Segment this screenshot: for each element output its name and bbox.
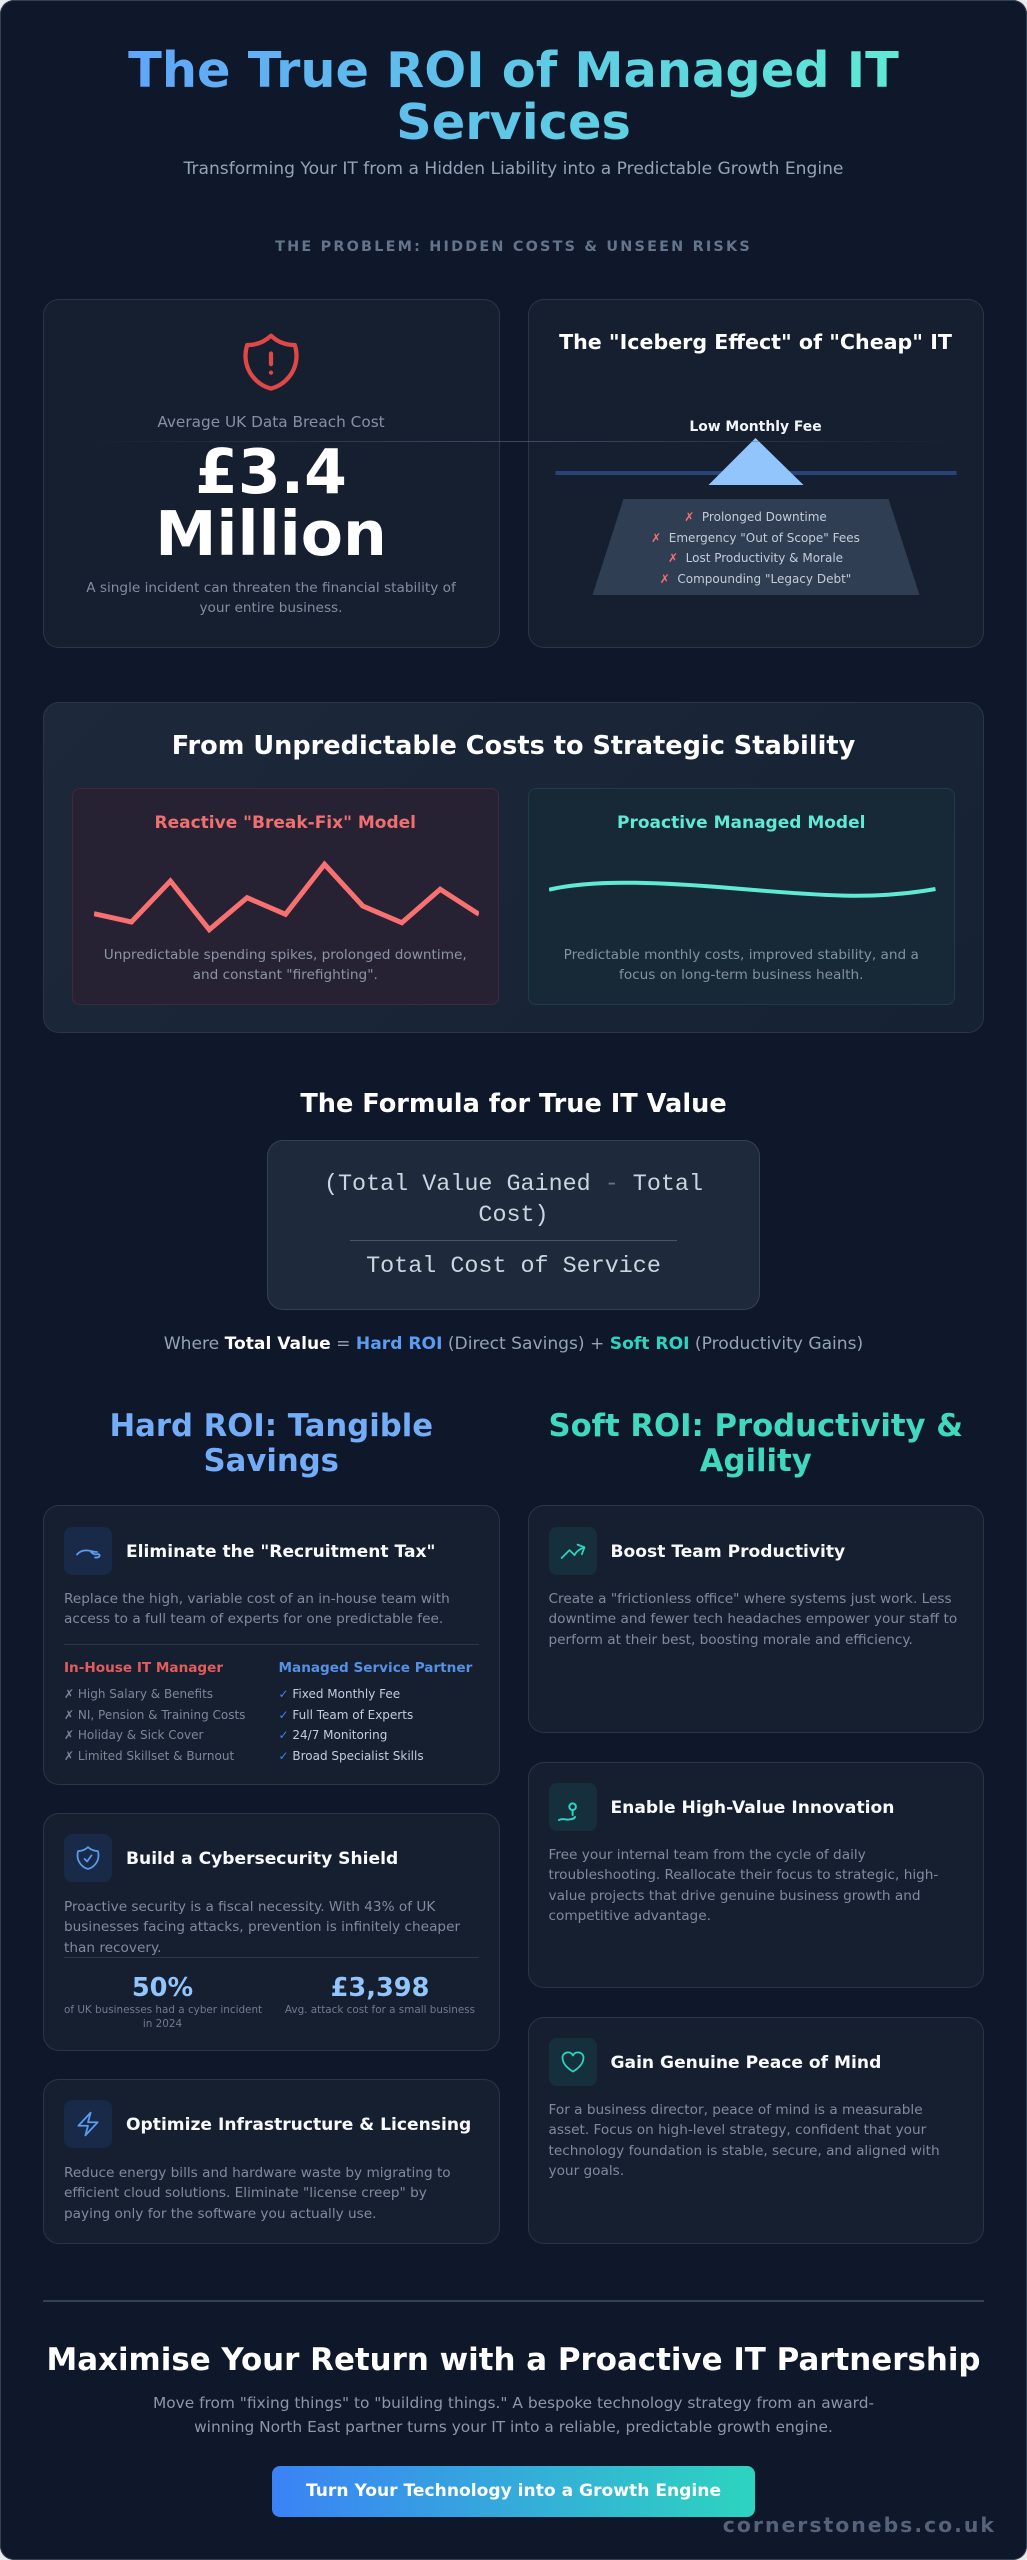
text: Free your internal team from the cycle of daily [548, 1847, 866, 1863]
card: team productivity [528, 1505, 984, 1733]
heading: iceberg: The "Iceberg Effect" of "Cheap" IT [559, 330, 952, 354]
heading: hard roi: Hard ROI: Tangible [109, 1409, 433, 1444]
text [548, 1847, 938, 1924]
text [64, 1591, 450, 1627]
icon: bolt [64, 2100, 112, 2148]
text: reactive description: and constant "firefighting". [193, 967, 378, 983]
list: ✗ Holiday & Sick Cover [64, 1728, 203, 1742]
text [548, 1591, 957, 1648]
heading: Gain Genuine Peace of Mind [610, 2053, 881, 2073]
card: recruitment tax [43, 1505, 500, 1785]
heading: hard roi: Savings [204, 1444, 339, 1479]
text: access to a full team of experts for one predictable fee. [64, 1611, 443, 1627]
text [64, 2165, 451, 2222]
list: ✗ Limited Skillset & Burnout [64, 1748, 234, 1762]
icon: shield alert [243, 334, 299, 391]
label: low monthly fee: Low Monthly Fee [689, 419, 822, 435]
text: your goals. [548, 2163, 624, 2179]
text: asset. Focus on high-level strategy, confident that your [548, 2122, 926, 2138]
text: than recovery. [64, 1940, 161, 1956]
text: call to action: winning North East partner turns your IT into a reliable, predictable growth engine. [194, 2418, 833, 2436]
text: Proactive security is a fiscal necessity. With 43% of UK [64, 1899, 435, 1915]
card: peace of mind [528, 2017, 984, 2244]
title: Services [396, 92, 631, 150]
heading: call to action: Maximise Your Return with a Proactive IT Partnership [46, 2342, 981, 2378]
chart: volatile cost line [94, 860, 479, 934]
heading: formula: The Formula for True IT Value [300, 1089, 727, 1119]
section label: the problem: THE PROBLEM: HIDDEN COSTS & UNSEEN RISKS [275, 239, 752, 255]
label: average cost: Average UK Data Breach Cost [157, 413, 385, 431]
panel: strategic stability [43, 702, 984, 1033]
text: call to action: Move from "fixing things" to "building things." A bespoke technology strategy from an award- [153, 2394, 874, 2412]
stat: 3.4 million: £3.4 [195, 436, 347, 508]
heading: soft roi: Agility [700, 1444, 812, 1479]
button: growth engine [272, 2466, 755, 2517]
stat: 50 percent: 50% [132, 1973, 193, 2003]
stat: 50 percent: in 2024 [143, 2018, 182, 2030]
heading: Build a Cybersecurity Shield [126, 1849, 398, 1869]
button: growth engine: Turn Your Technology into a Growth Engine [306, 2481, 721, 2501]
card: cybersecurity shield [43, 1813, 500, 2051]
stat: average attack cost: £3,398 [331, 1973, 429, 2003]
text [64, 1899, 460, 1956]
list: ✓ Fixed Monthly Fee [278, 1687, 400, 1701]
icon: shield check [64, 1834, 112, 1882]
stat: 3.4 million [155, 436, 387, 570]
formula denominator: Total Cost of Service [366, 1254, 661, 1280]
watermark: cornerstonebs.co.uk [723, 2513, 996, 2537]
chart: stable cost line [549, 880, 936, 898]
heading: Boost Team Productivity [610, 1542, 845, 1562]
text: reactive description: Unpredictable spending spikes, prolonged downtime, [104, 947, 467, 963]
heading: Optimize Infrastructure & Licensing [126, 2115, 471, 2135]
panel: reactive model [72, 788, 499, 1005]
text: breach description: A single incident can threaten the financial stability of [86, 580, 456, 596]
text: value projects that drive genuine business growth and [548, 1888, 921, 1904]
list: ✗ High Salary & Benefits [64, 1687, 213, 1701]
icon: heart [548, 2038, 596, 2086]
panel: iceberg effect [528, 299, 984, 648]
card: infrastructure and licensing [43, 2079, 500, 2244]
stat: 50 percent [64, 1973, 262, 2030]
heading: soft roi [548, 1409, 963, 1479]
list: hidden costs: ✗ Lost Productivity & Morale [668, 551, 843, 565]
list: hidden costs: ✗ Emergency "Out of Scope" Fees [651, 530, 860, 544]
text: breach description [86, 580, 456, 616]
list: hidden costs [651, 510, 860, 586]
text: competitive advantage. [548, 1908, 711, 1924]
card: innovation [528, 1762, 984, 1988]
text: proactive description [564, 947, 919, 983]
column heading: In-House IT Manager [64, 1660, 223, 1676]
text: technology foundation is stable, secure, and aligned with [548, 2143, 940, 2159]
text: proactive description: Predictable monthly costs, improved stability, and a [564, 947, 919, 963]
title [100, 44, 927, 148]
diagram: iceberg [556, 438, 956, 595]
list: hidden costs: ✗ Compounding "Legacy Debt" [660, 572, 851, 586]
comparison: managed partner [278, 1660, 472, 1762]
fraction bar [350, 1240, 677, 1241]
icon: piggy bank [64, 1527, 112, 1575]
panel: formula [267, 1140, 760, 1310]
footer divider [43, 2300, 984, 2302]
column heading: Managed Service Partner [278, 1660, 472, 1676]
text: proactive description: focus on long-term business health. [619, 967, 863, 983]
stat: average attack cost: Avg. attack cost for a small business [285, 2004, 475, 2016]
panel: data breach cost [43, 299, 500, 648]
title: The True ROI of Managed IT [128, 40, 899, 98]
stat: 3.4 million: Million [155, 498, 387, 570]
formula numerator [324, 1172, 703, 1229]
heading: proactive: Proactive Managed Model [617, 813, 865, 833]
list: hidden costs: ✗ Prolonged Downtime [684, 510, 827, 524]
divider [64, 1957, 479, 1958]
text [548, 2102, 940, 2179]
text: breach description: your entire business. [199, 600, 342, 616]
text: businesses facing attacks, prevention is infinitely cheaper [64, 1919, 460, 1935]
list: ✓ Full Team of Experts [278, 1708, 413, 1722]
list: ✓ Broad Specialist Skills [278, 1748, 424, 1762]
text: paying only for the software you actually use. [64, 2206, 377, 2222]
list: ✗ NI, Pension & Training Costs [64, 1708, 245, 1722]
text: Create a "frictionless office" where systems just work. Less [548, 1591, 952, 1607]
icon: trending up [548, 1527, 596, 1575]
text: reactive description [104, 947, 467, 983]
divider [64, 1644, 479, 1645]
formula numerator: Cost) [478, 1203, 549, 1229]
list [64, 1687, 245, 1762]
faint divider line [85, 441, 960, 442]
text: For a business director, peace of mind is a measurable [548, 2102, 923, 2118]
text: efficient cloud solutions. Eliminate "license creep" by [64, 2185, 427, 2201]
text: call to action [153, 2394, 874, 2436]
subtitle: Transforming Your IT from a Hidden Liability into a Predictable Growth Engine [184, 159, 843, 179]
text: Replace the high, variable cost of an in-house team with [64, 1591, 450, 1607]
heading: soft roi: Soft ROI: Productivity & [548, 1409, 963, 1444]
heading: Eliminate the "Recruitment Tax" [126, 1542, 435, 1562]
list: ✓ 24/7 Monitoring [278, 1728, 387, 1742]
list [278, 1687, 424, 1762]
text: formula key: Where Total Value = Hard ROI (Direct Savings) + Soft ROI (Productivity Gains) [164, 1334, 863, 1354]
formula numerator: (Total Value Gained - Total [324, 1172, 703, 1198]
stat: 50 percent: of UK businesses had a cyber incident [64, 2004, 262, 2016]
heading: hard roi [109, 1409, 433, 1479]
heading: reactive: Reactive "Break-Fix" Model [154, 813, 416, 833]
text: Reduce energy bills and hardware waste by migrating to [64, 2165, 451, 2181]
comparison: in-house [64, 1660, 245, 1762]
text: perform at their best, boosting morale and efficiency. [548, 1632, 913, 1648]
heading: stability: From Unpredictable Costs to Strategic Stability [172, 730, 855, 760]
panel: proactive model [528, 788, 955, 1005]
text: downtime and fewer tech headaches empower your staff to [548, 1611, 957, 1627]
text: troubleshooting. Reallocate their focus to strategic, high- [548, 1867, 938, 1883]
stat: average attack cost [285, 1973, 475, 2016]
heading: Enable High-Value Innovation [610, 1798, 894, 1818]
icon: hand with pin [548, 1783, 596, 1831]
